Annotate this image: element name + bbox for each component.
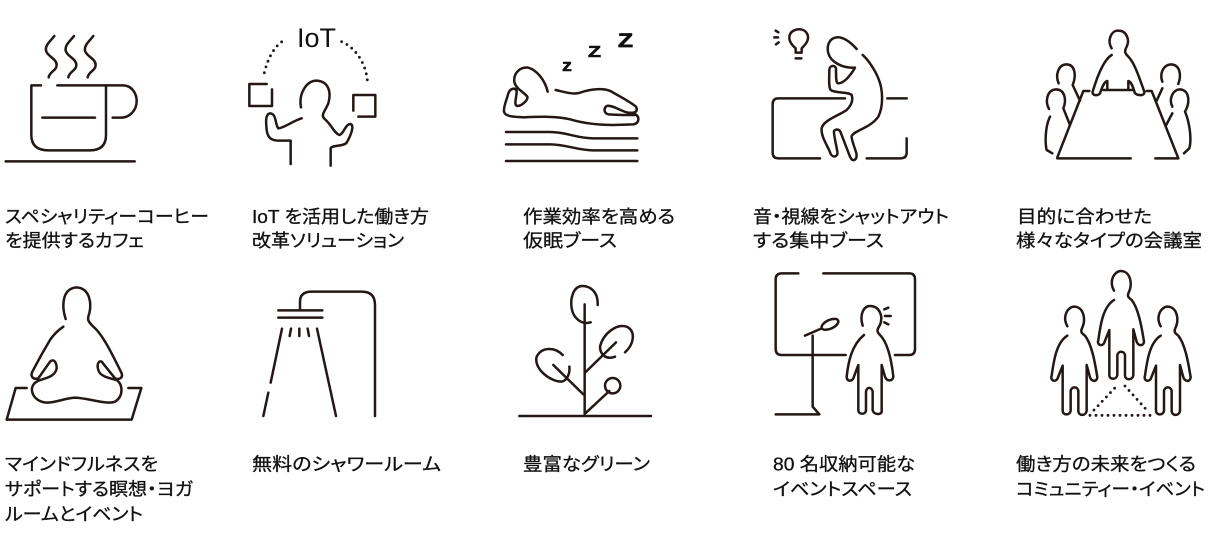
icon: person juggling IoT devices: [249, 39, 375, 166]
label: coffee: を提供するカフェ: [5, 231, 144, 251]
panel: focus booth: [753, 29, 949, 251]
label: community: 働き方の未来をつくる: [1016, 454, 1196, 474]
label: meditation: [5, 454, 194, 524]
icon: shower: [263, 292, 375, 416]
label: nap booth: 仮眠ブース: [523, 230, 617, 251]
label: meditation: サポートする瞑想・ヨガ: [5, 480, 194, 500]
label: coffee: [5, 207, 209, 251]
icon text: Z letters: z: [562, 56, 572, 75]
panel: greenery: [519, 286, 651, 474]
icon text: IoT: IoT: [297, 23, 336, 53]
icon: meditating person on mat: [7, 287, 141, 420]
label: IoT: 改革ソリューション: [252, 231, 404, 251]
panel: meeting rooms: [1016, 31, 1202, 251]
label: focus booth: [753, 207, 949, 251]
label: event space: 80 名収納可能な: [773, 454, 915, 474]
label: meditation: ルームとイベント: [5, 504, 143, 524]
icon: person thinking at desk: [773, 29, 907, 160]
panel: nap booth: [504, 31, 675, 251]
label: nap booth: 作業効率を高める: [523, 207, 675, 227]
label: meditation: マインドフルネスを: [5, 454, 158, 474]
label: IoT: [252, 207, 429, 251]
icon text: Z letters: Z: [588, 44, 601, 61]
label: IoT: IoT を活用した働き方: [252, 207, 429, 227]
label: focus booth: 音・視線をシャットアウト: [753, 207, 949, 227]
label: focus booth: する集中ブース: [753, 230, 884, 251]
icon: coffee cup: [6, 36, 137, 161]
icon: sleeping person: [504, 68, 638, 161]
icon: people around table: [1046, 31, 1190, 158]
label: community: コミュニティー・イベント: [1016, 480, 1205, 500]
icon: speaker with microphone: [776, 273, 915, 414]
label: community: [1016, 454, 1205, 500]
panel: event space: [773, 273, 915, 500]
label: coffee: スペシャリティーコーヒー: [5, 207, 209, 227]
label: meeting rooms: 目的に合わせた: [1017, 207, 1152, 227]
panel: meditation: [5, 287, 194, 524]
icon text: Z letters: [562, 31, 634, 75]
panel: community: [1016, 271, 1205, 500]
label: greenery: 豊富なグリーン: [523, 454, 650, 474]
panel: coffee: [5, 36, 209, 251]
icon: three people and dotted triangle: [1051, 271, 1191, 415]
label: meeting rooms: 様々なタイプの会議室: [1016, 231, 1202, 251]
label: meeting rooms: [1016, 207, 1202, 251]
label: nap booth: [523, 207, 675, 251]
icon: plant: [519, 286, 651, 416]
label: event space: イベントスペース: [773, 480, 912, 500]
panel: shower: [252, 292, 441, 474]
label: shower: 無料のシャワールーム: [252, 454, 441, 474]
label: event space: [773, 454, 915, 500]
icon text: Z letters: Z: [618, 31, 634, 52]
panel: IoT: [249, 23, 429, 251]
